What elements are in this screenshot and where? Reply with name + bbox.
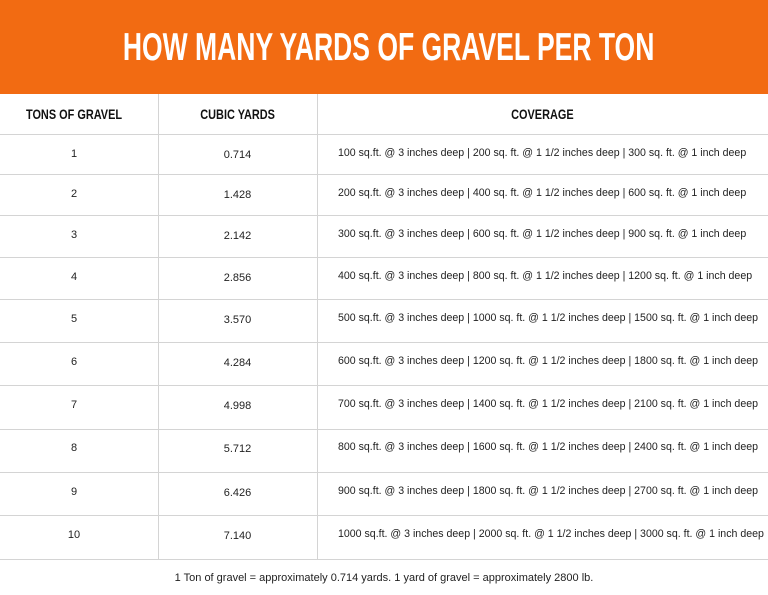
table rows: 5.712 xyxy=(224,443,251,455)
table rows: 700 sq.ft. @ 3 inches deep | 1400 sq. ft. @ 1 1/2 inches deep | 2100 sq. ft. @ 1 inch deep xyxy=(338,398,758,410)
column headers: COVERAGE xyxy=(511,106,574,122)
table rows: 5 xyxy=(71,313,77,325)
table rows xyxy=(68,147,764,542)
table rows: 800 sq.ft. @ 3 inches deep | 1600 sq. ft. @ 1 1/2 inches deep | 2400 sq. ft. @ 1 inch deep xyxy=(338,441,758,453)
table rows: 7 xyxy=(71,399,77,411)
table rows: 1000 sq.ft. @ 3 inches deep | 2000 sq. ft. @ 1 1/2 inches deep | 3000 sq. ft. @ 1 inch deep xyxy=(338,528,764,540)
table rows: 2 xyxy=(71,188,77,200)
table rows: 1 xyxy=(71,148,77,160)
title: HOW MANY YARDS OF GRAVEL PER TON xyxy=(123,26,654,69)
table rows: 600 sq.ft. @ 3 inches deep | 1200 sq. ft. @ 1 1/2 inches deep | 1800 sq. ft. @ 1 inch deep xyxy=(338,355,758,367)
table rows: 400 sq.ft. @ 3 inches deep | 800 sq. ft. @ 1 1/2 inches deep | 1200 sq. ft. @ 1 inch deep xyxy=(338,270,752,282)
table rows: 500 sq.ft. @ 3 inches deep | 1000 sq. ft. @ 1 1/2 inches deep | 1500 sq. ft. @ 1 inch deep xyxy=(338,312,758,324)
table rows: 4 xyxy=(71,271,77,283)
footer note: 1 Ton of gravel = approximately 0.714 yards. 1 yard of gravel = approximately 2800 lb. xyxy=(175,572,593,584)
table rows: 900 sq.ft. @ 3 inches deep | 1800 sq. ft. @ 1 1/2 inches deep | 2700 sq. ft. @ 1 inch deep xyxy=(338,485,758,497)
table rows: 2.142 xyxy=(224,230,251,242)
table rows: 10 xyxy=(68,529,80,541)
table rows: 2.856 xyxy=(224,272,251,284)
table rows: 4.284 xyxy=(224,357,251,369)
table rows: 6 xyxy=(71,356,77,368)
column headers xyxy=(26,106,574,122)
table rows: 100 sq.ft. @ 3 inches deep | 200 sq. ft. @ 1 1/2 inches deep | 300 sq. ft. @ 1 inch deep xyxy=(338,147,746,159)
table rows: 8 xyxy=(71,442,77,454)
header banner xyxy=(0,0,768,94)
table rows: 3.570 xyxy=(224,314,251,326)
table rows: 6.426 xyxy=(224,487,251,499)
table rows: 3 xyxy=(71,229,77,241)
table rows: 4.998 xyxy=(224,400,251,412)
table rows: 300 sq.ft. @ 3 inches deep | 600 sq. ft. @ 1 1/2 inches deep | 900 sq. ft. @ 1 inch deep xyxy=(338,228,746,240)
table rows: 0.714 xyxy=(224,149,251,161)
table rows: 7.140 xyxy=(224,530,251,542)
table rows: 1.428 xyxy=(224,189,251,201)
table rows: 200 sq.ft. @ 3 inches deep | 400 sq. ft. @ 1 1/2 inches deep | 600 sq. ft. @ 1 inch deep xyxy=(338,187,746,199)
column headers: TONS OF GRAVEL xyxy=(26,106,122,122)
column headers: CUBIC YARDS xyxy=(200,106,275,122)
table rows: 9 xyxy=(71,486,77,498)
